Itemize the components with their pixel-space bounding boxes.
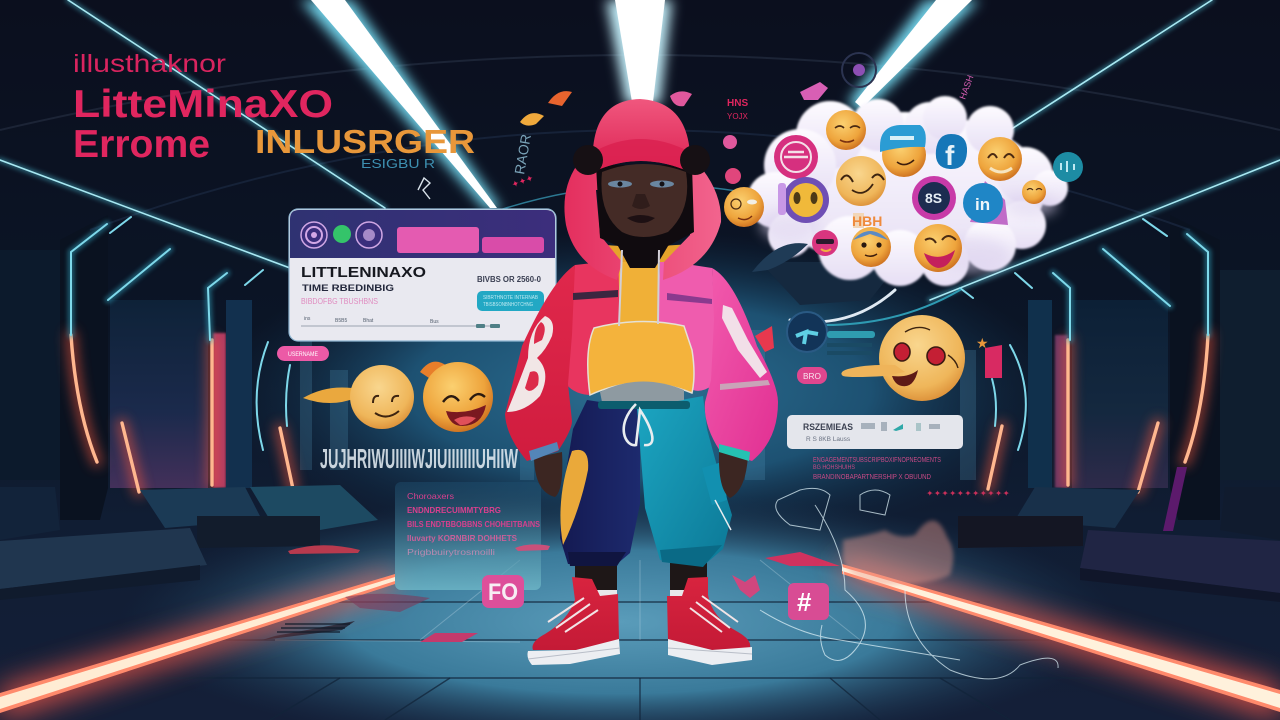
pink text lines right: ✦✦✦✦✦✦✦✦✦✦✦ <box>926 489 1010 498</box>
pink chip left: USERNAME <box>288 352 318 358</box>
title block: ESIGBU R <box>361 156 435 171</box>
profile card: BIBDOFBG TBUSHBNS <box>301 296 378 306</box>
translucent info panel: ENDNDRECUIMMTYBRG <box>407 505 501 515</box>
pink chip right <box>797 367 827 384</box>
left sleeve red <box>505 265 575 461</box>
translucent info panel <box>395 482 541 590</box>
profile card: LITTLENINAXO <box>301 265 426 281</box>
icon: Instagram style: 8S <box>925 190 942 206</box>
emoji laughing <box>914 224 962 272</box>
cloud of social icons <box>724 96 1083 305</box>
icon: pink circle <box>774 135 818 179</box>
icon: Instagram style <box>912 176 956 220</box>
icon: LinkedIn: in <box>975 195 990 214</box>
socks <box>575 560 707 598</box>
profile card: TIME RBEDINBIG <box>302 283 394 294</box>
icon: blue cap emoji <box>880 125 926 177</box>
icon: teal circle <box>1053 152 1083 182</box>
title block: Errome <box>73 123 210 166</box>
profile card: Bhat <box>363 318 374 324</box>
icon: LinkedIn <box>963 181 1008 225</box>
city glow columns <box>300 330 976 480</box>
face <box>601 164 687 237</box>
small heart and star: ★ <box>976 335 989 351</box>
pink chip right: BRO <box>803 372 821 381</box>
floating doodles near title: YOJX <box>727 112 749 121</box>
profile card: B5B5 <box>335 318 347 324</box>
emoji smile <box>978 137 1022 181</box>
title block: INLUSRGER <box>255 123 475 160</box>
icon: purple ring emoji <box>778 177 829 223</box>
jacket body <box>566 260 620 395</box>
icon: Facebook <box>936 134 967 171</box>
swoosh under cloud <box>790 290 960 325</box>
pink text lines right: ENGAGEMENTSUBSCRIPBOXIFNOPNEOMENTS <box>813 457 941 464</box>
pink text lines right: BG HOHSHUIHS <box>813 465 855 471</box>
swoosh in cloud <box>752 243 808 272</box>
translucent info panel: Iluvarty KORNBIR DOHHETS <box>407 533 517 543</box>
small pink bird <box>732 575 760 598</box>
floating doodles near title <box>418 53 975 199</box>
profile card <box>289 209 556 341</box>
hood <box>564 165 721 280</box>
hands <box>534 452 562 497</box>
floor panels <box>0 602 1280 720</box>
birthday candles: HBH <box>852 213 882 229</box>
small floor stripe vents <box>277 624 350 632</box>
light beams <box>0 0 1280 300</box>
trousers <box>560 400 640 564</box>
emoji: smiling with blonde tail <box>303 365 414 429</box>
chest pouch <box>588 321 694 395</box>
hash badge: # <box>797 587 812 617</box>
icon: Facebook: f <box>945 140 955 171</box>
yellow shirt <box>618 248 660 326</box>
FO badge <box>482 575 524 608</box>
translucent info panel: Choroaxers <box>407 491 454 501</box>
hair <box>596 165 694 268</box>
hash badge <box>788 583 829 620</box>
emoji top <box>826 110 866 150</box>
emoji: laughing with orange hair <box>420 362 493 432</box>
emoji left wink <box>724 187 764 227</box>
emoji bottom <box>851 227 891 267</box>
profile card: Bus <box>430 319 439 325</box>
FO badge: FO <box>488 579 518 606</box>
smoke ribbon and line art <box>760 488 1058 679</box>
floor scatter <box>288 544 550 612</box>
translucent info panel: BILS ENDTBBOBBNS CHOHEITBAINS <box>407 519 540 529</box>
dark base swirl <box>760 262 900 305</box>
sleeve graphics <box>507 316 553 412</box>
cloud shape <box>747 96 1068 286</box>
glitch text band: JUJHRIWUIIIIWJIUIIIIIIIUHIIW <box>320 443 518 474</box>
floor glow <box>120 492 1120 720</box>
emoji small right <box>1022 180 1046 204</box>
right sleeve pink <box>705 268 778 461</box>
pink chip left <box>277 346 329 361</box>
title block: illusthaknor <box>73 50 226 78</box>
floor neon beams <box>0 558 1280 720</box>
pink text lines right <box>813 457 1010 498</box>
emoji big smile <box>836 156 886 206</box>
beanie <box>593 99 690 172</box>
translucent info panel: Prigbbuirytrosmoilli <box>407 547 495 557</box>
title block: LitteMinaXO <box>73 83 333 126</box>
benches <box>0 467 1280 602</box>
pink text lines right: BRANDINOBAPARTNERSHIP X OBUUND <box>813 474 931 481</box>
profile card: SIBRTHNOTE INTERNAB <box>483 295 539 301</box>
white stat panel <box>787 415 963 449</box>
card icons <box>301 222 382 248</box>
profile card: BIVBS OR 2560-0 <box>477 275 542 284</box>
sneakers <box>528 577 752 665</box>
floating doodles near title: RAOR <box>511 133 534 176</box>
white stat panel: RSZEMIEAS <box>803 422 853 432</box>
floating doodles near title: HASH <box>957 74 975 101</box>
waistband and drawstring <box>600 381 684 405</box>
small heart and star <box>755 326 1002 378</box>
wall panels <box>0 215 1280 520</box>
wall neon lights <box>71 217 1208 492</box>
floating doodles near title: ✦✦✦ <box>510 173 535 190</box>
pockets and zip <box>573 290 618 300</box>
white stat panel: R S 8KB Lauss <box>806 436 851 443</box>
title block <box>73 50 475 171</box>
floating doodles near title: HNS <box>727 98 748 109</box>
profile card: ins <box>304 316 311 322</box>
profile card: TBISBSONBNHOTCHNG <box>483 302 533 308</box>
blue circle with bar <box>787 312 875 355</box>
character: girl in puffer jacket <box>505 99 778 665</box>
emoji: long-nose red eyes <box>841 315 965 401</box>
emoji pink sunglasses <box>812 230 838 256</box>
